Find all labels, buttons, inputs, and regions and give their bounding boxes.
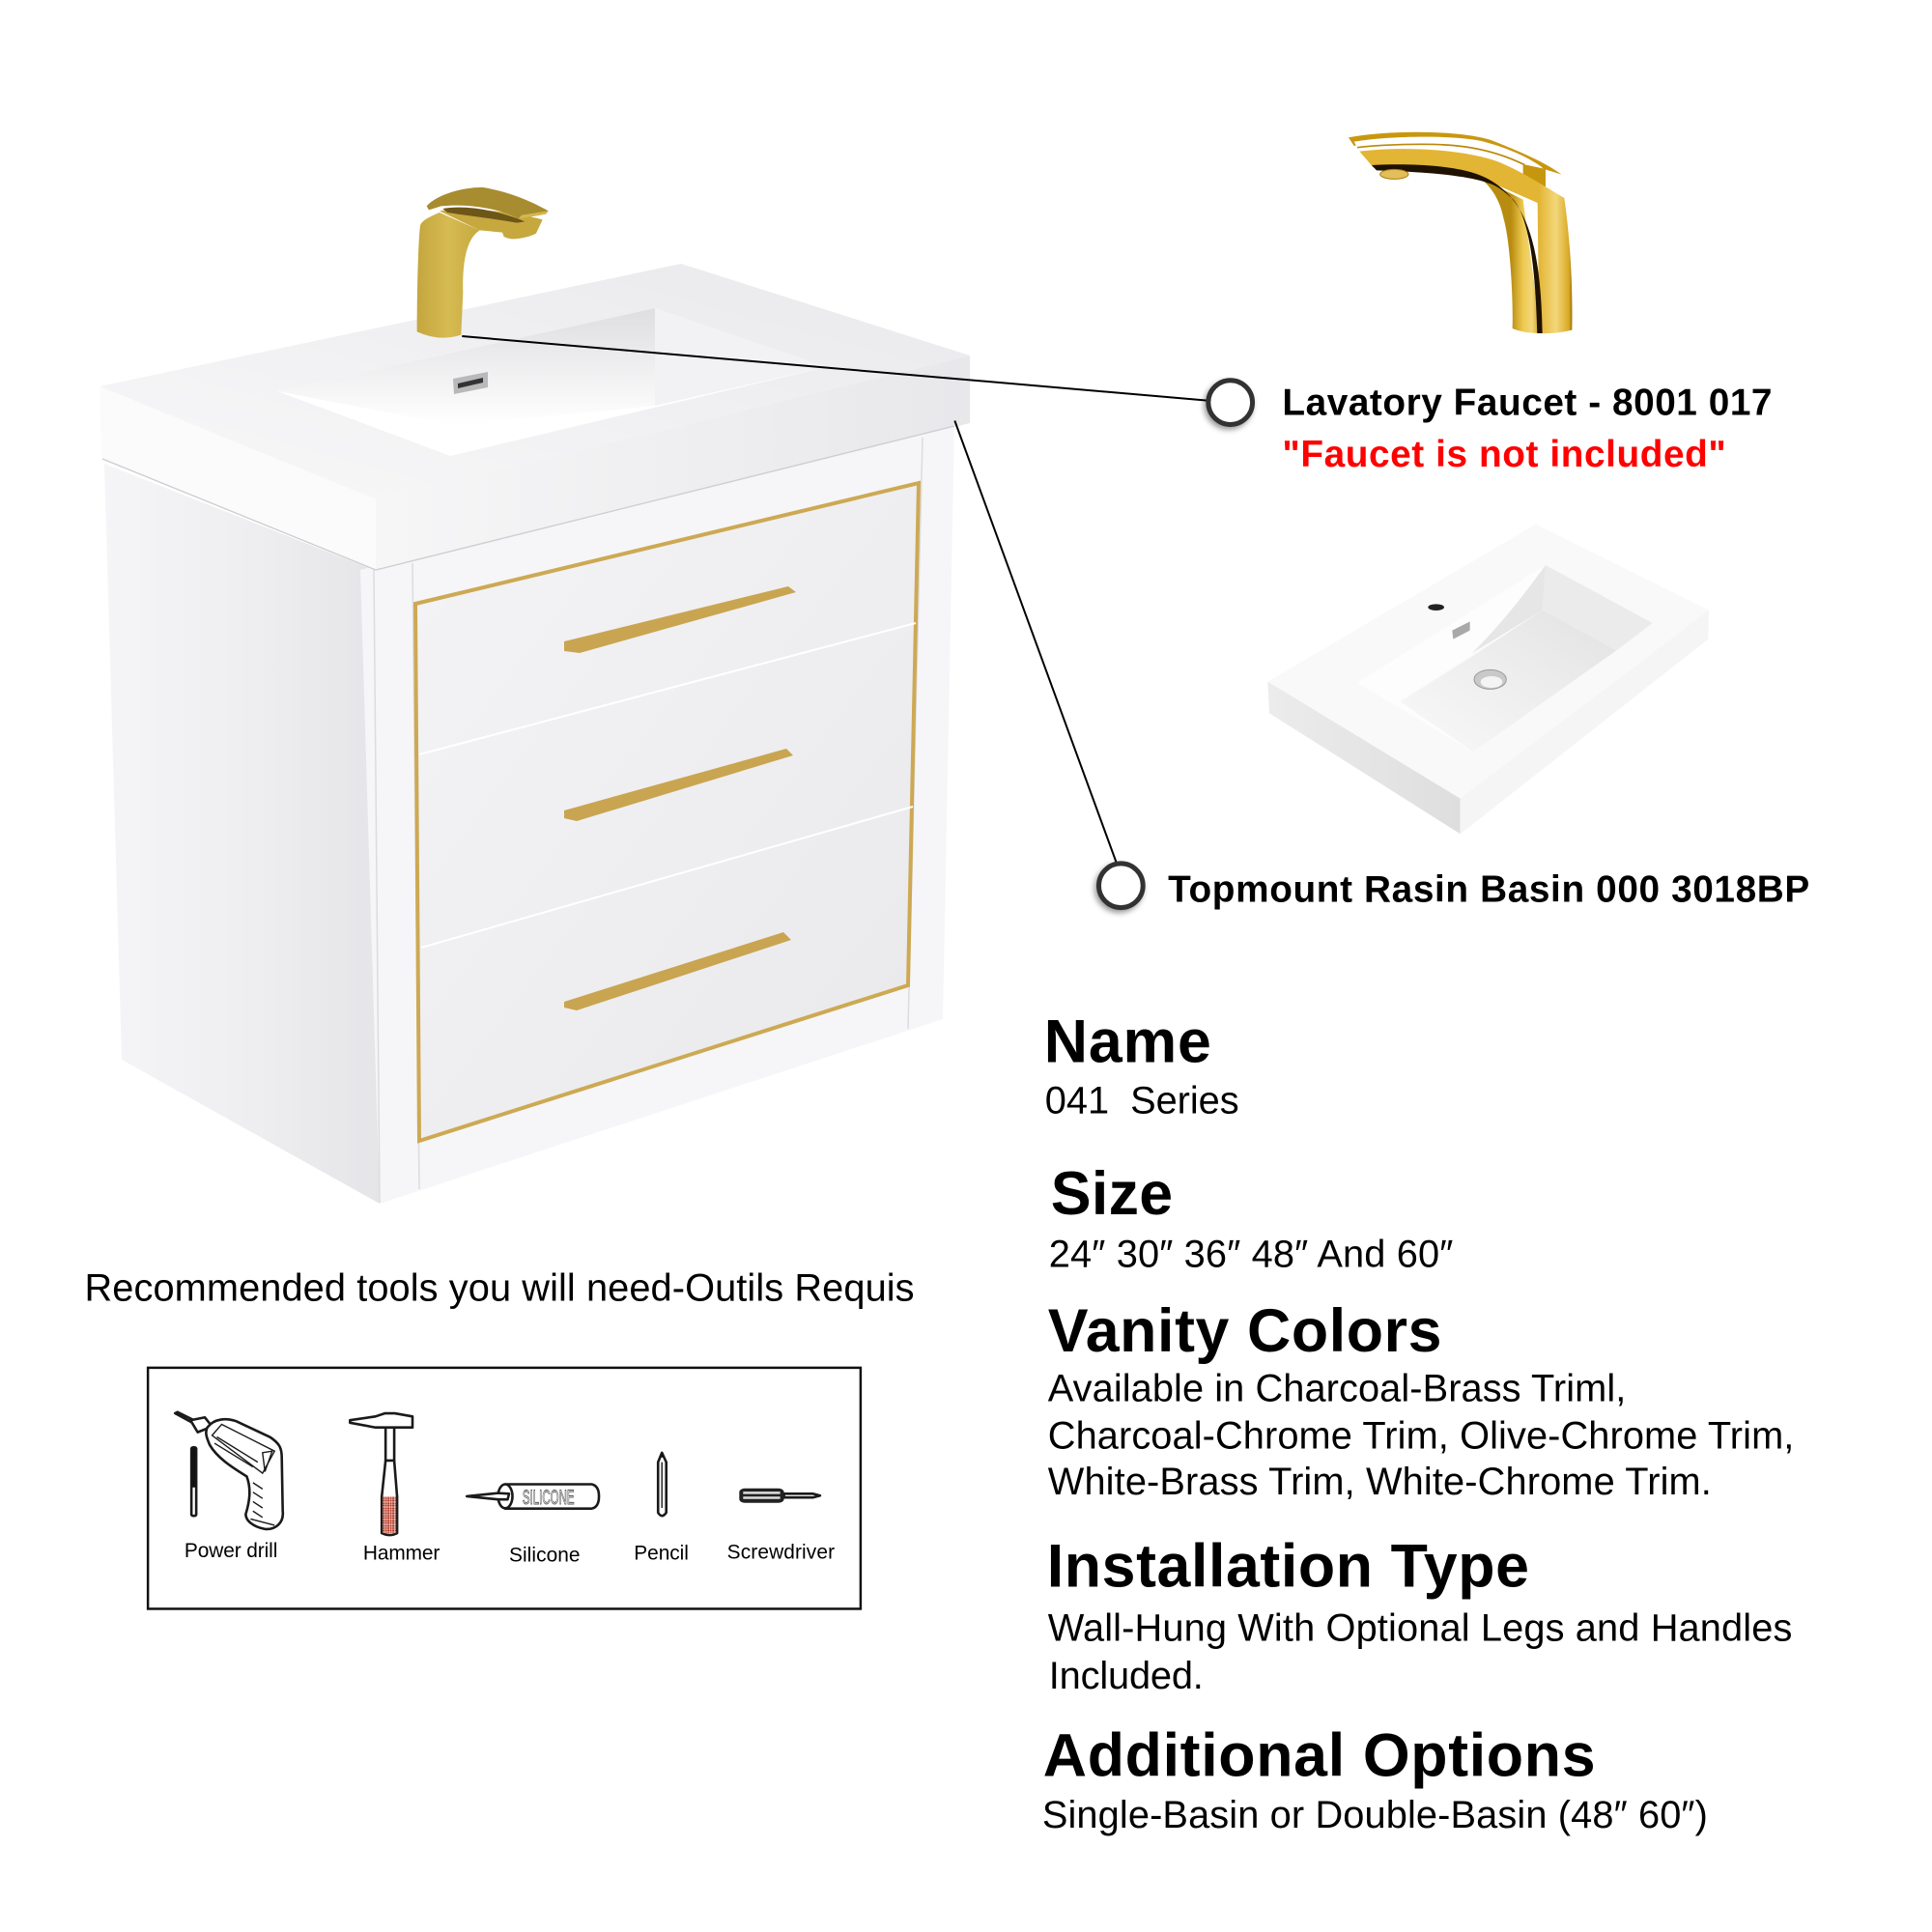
cabinet front frame [360,423,954,1204]
spec: vanity colors description: Available in Charcoal-Brass Triml, [1048,1368,1626,1410]
overflow [1452,621,1470,639]
drawer handle bottom [564,932,791,1010]
drawer fronts [415,483,919,1141]
label: hammer: Hammer [363,1543,440,1565]
label: screwdriver: Screwdriver [727,1542,835,1564]
vanity top front edge [376,355,970,570]
spec: additional options heading: Additional Options [1043,1721,1596,1789]
drawer handle top [564,586,796,653]
spec: installation type description [1048,1606,1792,1697]
gold trim frame [415,483,919,1141]
cabinet left side panel [104,464,380,1204]
bowl floor [1401,611,1616,752]
spec: additional options value: Single-Basin or Double-Basin (48″ 60″) [1042,1794,1708,1836]
callout label: basin: Topmount Rasin Basin 000 3018BP [1168,869,1809,911]
bowl shadow [1471,565,1546,654]
bowl left wall [1357,565,1546,752]
topmount basin product photo [1267,525,1709,834]
leader line: basin [954,421,1117,865]
tools heading: Recommended tools you will need-Outils Requis [84,1266,915,1309]
spec: installation type description: Wall-Hung With Optional Legs and Handles [1048,1606,1792,1649]
icon: silicone tube [467,1484,599,1509]
tools panel border [148,1368,861,1608]
spec: name heading: Name [1044,1009,1211,1076]
drain [1474,669,1506,689]
vanity top surface [99,264,970,499]
label: power drill: Power drill [185,1540,277,1562]
spec: vanity colors description: Charcoal-Chrome Trim, Olive-Chrome Trim, [1048,1414,1794,1457]
polished gold faucet product photo [1349,132,1572,333]
vanity top left edge [99,386,376,570]
mounted faucet [417,187,549,338]
icon: pencil [658,1453,667,1516]
tool icons [175,1412,820,1535]
spec: installation type description: Included. [1049,1655,1204,1697]
faucet hole [1428,604,1444,611]
overflow drain [453,372,488,394]
bowl back wall [1543,565,1653,650]
spec: size heading: Size [1051,1160,1173,1228]
callout marker: faucet [1208,381,1253,424]
drawer dividing lines [419,623,916,948]
callout warning: faucet not included: "Faucet is not included" [1282,434,1726,475]
icon: hammer [350,1413,412,1535]
silicone tube lettering: SILICONE [523,1487,575,1509]
spec: vanity colors description: White-Brass Trim, White-Chrome Trim. [1048,1461,1712,1503]
vanity cabinet illustration [99,187,970,1204]
text, callouts and tool panel layer [84,336,1809,1836]
icon: screwdriver [739,1489,820,1503]
spec: installation type heading: Installation Type [1047,1533,1529,1601]
spec: vanity colors description [1048,1368,1794,1503]
cabinet edge lines [374,438,923,1203]
shadow seams under the top [102,426,954,570]
label: silicone: Silicone [509,1545,581,1567]
basin front-left edge [1267,682,1461,834]
integrated basin [277,308,826,456]
spec: vanity colors heading: Vanity Colors [1048,1297,1441,1365]
leader line: faucet [462,336,1208,401]
icon: power drill [175,1412,283,1529]
spec: name value: 041 Series [1045,1079,1239,1122]
callout label: faucet: Lavatory Faucet - 8001 017 [1282,383,1772,424]
label: pencil: Pencil [634,1543,689,1565]
basin top slab [1267,525,1709,799]
callout marker: basin [1098,864,1143,908]
drawer handle middle [564,749,793,821]
basin right edge [1461,611,1709,834]
spec: size value: 24″ 30″ 36″ 48″ And 60″ [1049,1233,1453,1275]
